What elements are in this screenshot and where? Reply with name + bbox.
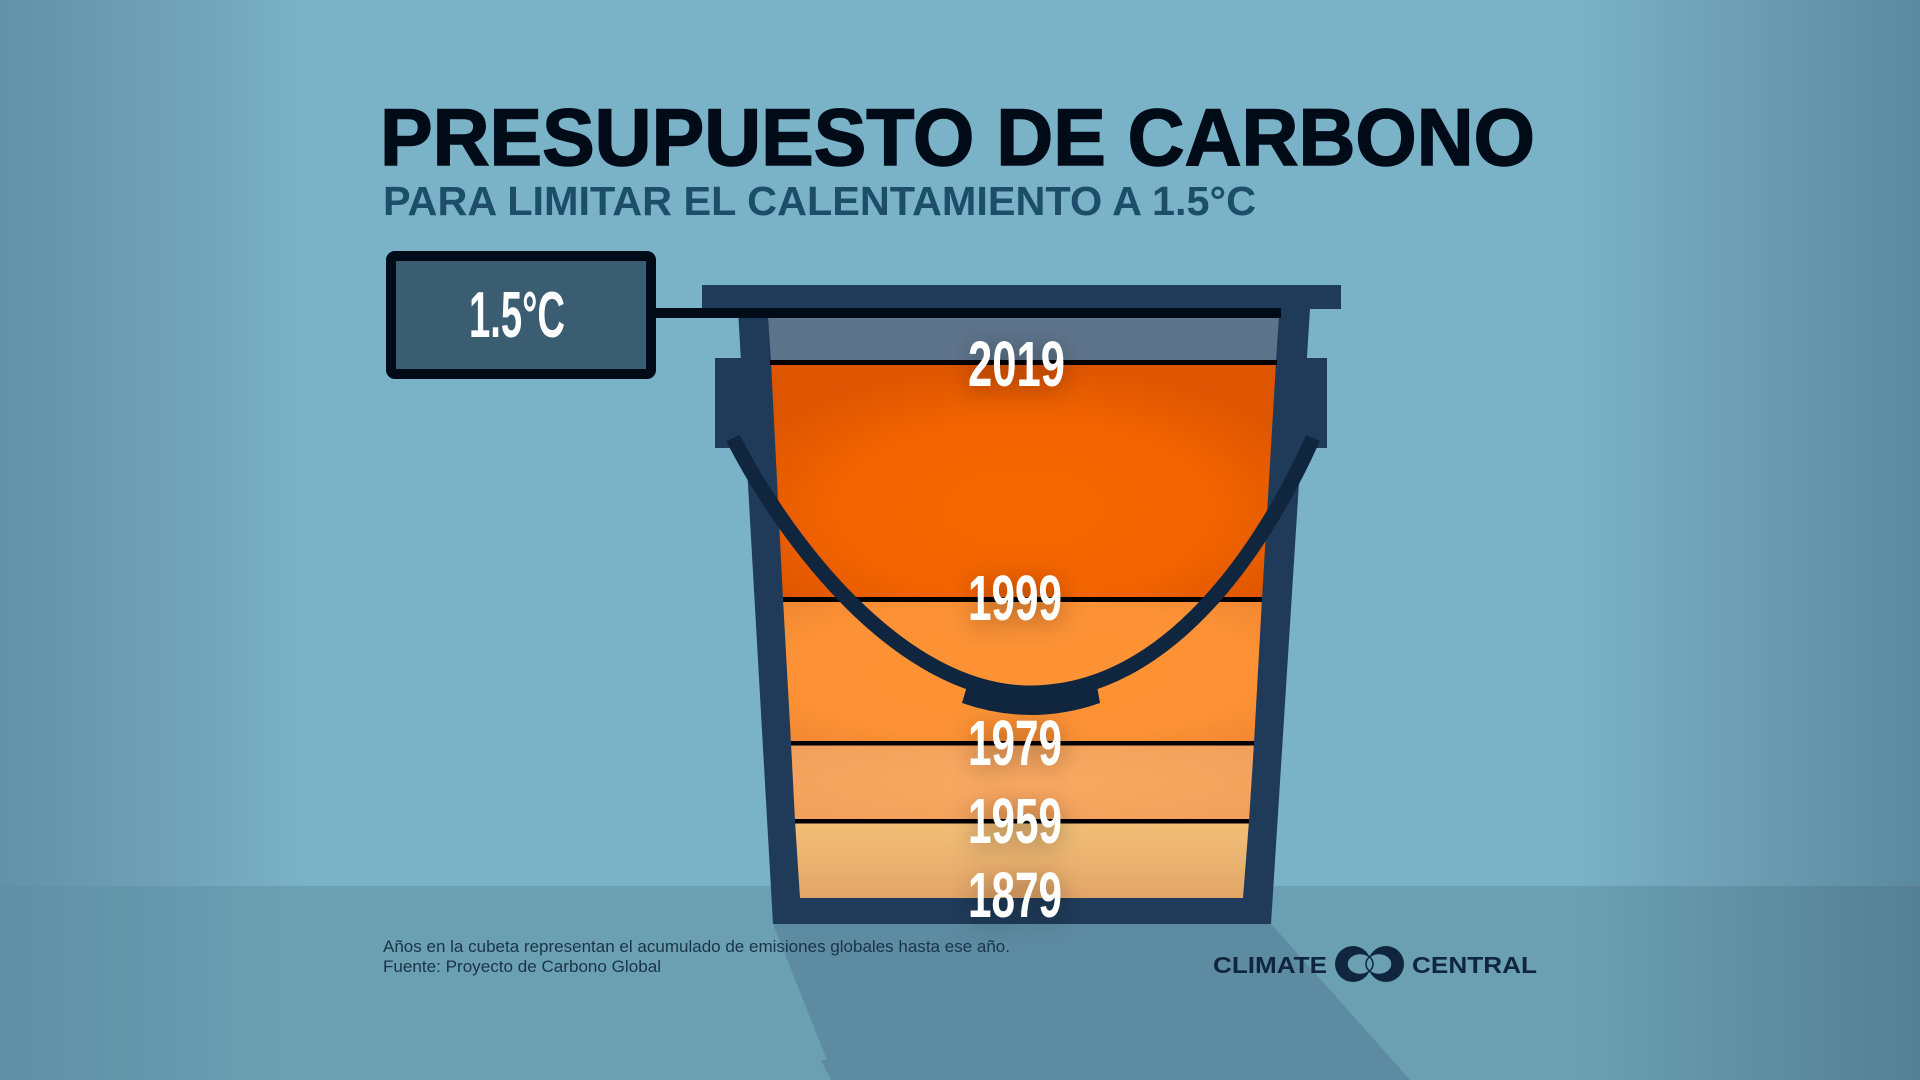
year labels [968, 328, 1065, 931]
layer 1959 to 1979 [791, 743, 1254, 821]
floor [0, 886, 1920, 1080]
bucket lugs [715, 358, 1327, 448]
subtitle: PARA LIMITAR EL CALENTAMIENTO A 1.5°C [383, 178, 1256, 224]
bucket shadow [773, 924, 1410, 1080]
bucket [702, 285, 1341, 924]
year 2019: 2019 [968, 328, 1065, 400]
handle grip [962, 686, 1100, 715]
year 1879: 1879 [968, 859, 1062, 931]
year 1999: 1999 [968, 562, 1062, 634]
threshold line [650, 308, 1281, 318]
footnote [383, 937, 1010, 976]
layer 1999 to 2019 [771, 362, 1276, 599]
logo word right: CENTRAL [1412, 952, 1537, 978]
bucket body [738, 309, 1310, 924]
layer 1979 to 1999 [783, 599, 1262, 743]
source line: Fuente: Proyecto de Carbono Global [383, 957, 661, 976]
bucket lid [702, 285, 1341, 309]
bucket handle [733, 438, 1313, 715]
handle wire [733, 438, 1313, 693]
logo rings [1335, 946, 1404, 982]
layer 1879 to 1959 [795, 821, 1249, 898]
year level lines [770, 360, 1277, 824]
remaining budget layer [768, 316, 1279, 361]
threshold box [391, 256, 651, 374]
threshold label: 1.5°C [469, 278, 565, 351]
year 1979: 1979 [968, 707, 1062, 779]
Climate Central logo [1213, 946, 1537, 982]
year 1959: 1959 [968, 785, 1062, 857]
title: PRESUPUESTO DE CARBONO [380, 93, 1535, 183]
logo word left: CLIMATE [1213, 952, 1327, 978]
footnote line 1: Años en la cubeta representan el acumulado de emisiones globales hasta ese año. [383, 937, 1010, 956]
